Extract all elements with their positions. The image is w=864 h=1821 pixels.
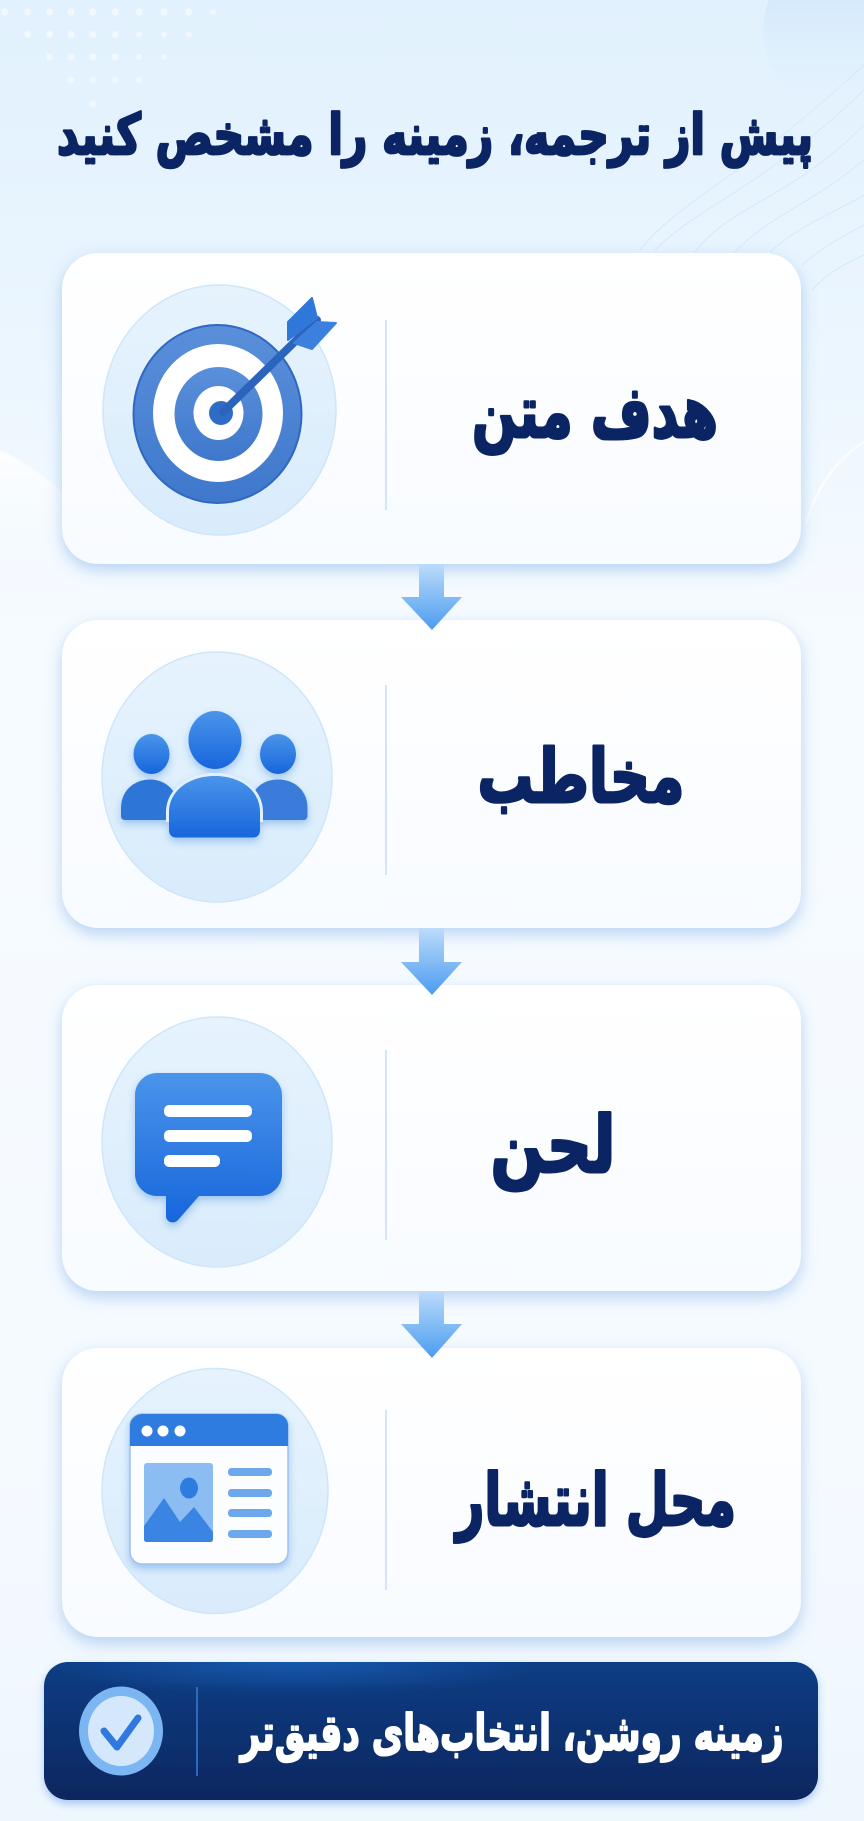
label: publication place: محل انتشار [454,1458,736,1543]
panel: audience [62,620,801,928]
label: tone: لحن [490,1101,616,1191]
panel: tone [62,985,801,1291]
divider [196,1687,198,1776]
icon: web page window [102,1368,328,1614]
label: text goal: هدف متن [472,370,718,455]
icon: audience group [102,652,332,902]
footer banner [44,1662,818,1800]
arrow: tone to publication place [401,1291,462,1358]
divider [385,1050,387,1240]
icon: check badge [79,1686,163,1776]
panel: publication place [62,1348,801,1637]
arrow: goal to audience [401,564,462,630]
icon: speech bubble [102,1017,332,1267]
divider [385,685,387,875]
panel: text goal [62,253,801,564]
divider [385,320,387,510]
label: audience: مخاطب [478,734,684,820]
arrow: audience to tone [401,928,462,995]
icon: target with arrow [103,285,336,535]
divider [385,1410,387,1590]
